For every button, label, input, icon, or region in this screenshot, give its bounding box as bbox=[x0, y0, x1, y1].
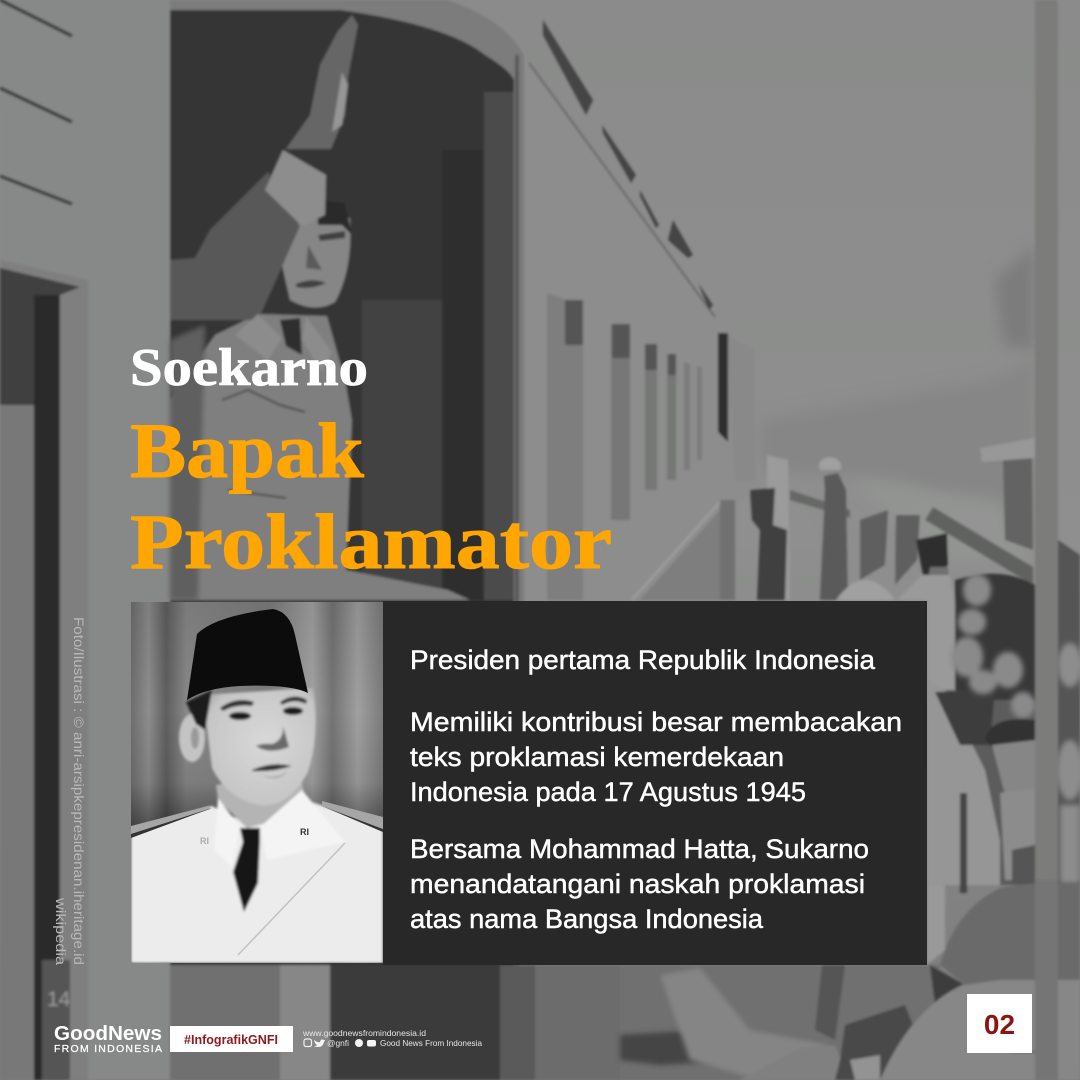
nose shadow bbox=[256, 726, 289, 751]
sleeve bbox=[170, 172, 300, 320]
photo credit bbox=[53, 617, 86, 966]
pocket flaps bbox=[222, 390, 305, 412]
uniform bbox=[131, 800, 383, 963]
man waving bbox=[170, 15, 470, 600]
distant haze and trees bbox=[760, 245, 1035, 600]
icon: facebook bbox=[355, 1039, 363, 1047]
train carriage side bbox=[524, 20, 760, 600]
neck bbox=[215, 782, 304, 830]
RI badges bbox=[200, 828, 308, 844]
footer logo: GoodNews From Indonesia bbox=[54, 1022, 162, 1055]
cuff bbox=[265, 150, 326, 226]
tie bbox=[233, 828, 260, 912]
title: Soekarno: Soekarno bbox=[130, 339, 368, 397]
text panel bbox=[383, 601, 927, 965]
photo credit: wikipedia bbox=[53, 897, 68, 966]
title: Bapak Proklamator bbox=[130, 407, 612, 585]
eyes bbox=[229, 712, 251, 720]
social links: Good News From Indonesia bbox=[380, 1038, 482, 1048]
fact 3: menandatangani naskah proklamasi bbox=[410, 869, 865, 899]
brows bbox=[220, 696, 307, 711]
fact 2: Indonesia pada 17 Agustus 1945 bbox=[410, 777, 806, 807]
social links: www.goodnewsfromindonesia.id bbox=[302, 1028, 426, 1038]
dark train door opening bbox=[170, 0, 524, 1080]
social links: @gnfi bbox=[327, 1038, 349, 1048]
fact 2 bbox=[410, 707, 902, 807]
hair bbox=[317, 200, 352, 235]
hashtag badge bbox=[170, 1026, 293, 1052]
fact 1: Presiden pertama Republik Indonesia bbox=[410, 645, 876, 675]
fez hat bbox=[187, 609, 308, 700]
page number bbox=[967, 994, 1032, 1053]
collar and tie bbox=[235, 314, 332, 372]
footer logo: GoodNews From Indonesia: GoodNews bbox=[54, 1022, 162, 1045]
icon: twitter bbox=[314, 1039, 325, 1047]
title: Bapak Proklamator: Proklamator bbox=[130, 498, 612, 585]
fact 2: teks proklamasi kemerdekaan bbox=[410, 742, 784, 772]
fact 2: Memiliki kontribusi besar membacakan bbox=[410, 707, 902, 737]
faint page number on the door: 14 bbox=[47, 988, 71, 1011]
footer logo: GoodNews From Indonesia: FROM INDONESIA bbox=[54, 1043, 162, 1055]
page number: 02 bbox=[984, 1009, 1015, 1040]
collar bbox=[216, 798, 232, 818]
mouth bbox=[252, 764, 292, 771]
icon: instagram bbox=[304, 1039, 312, 1046]
bottom foreground bbox=[170, 883, 1080, 1080]
epaulettes bbox=[131, 801, 383, 835]
crowd right of the pole bbox=[1057, 540, 1080, 885]
torso shadow on left bbox=[170, 325, 205, 600]
fact 3 bbox=[410, 834, 869, 934]
hashtag badge: #InfografikGNFI bbox=[184, 1033, 278, 1047]
fact 3: Bersama Mohammad Hatta, Sukarno bbox=[410, 834, 869, 864]
hair at the temple bbox=[186, 690, 212, 730]
social links bbox=[302, 1028, 482, 1048]
face bbox=[203, 688, 316, 806]
coat line bbox=[238, 843, 345, 955]
icon: youtube bbox=[367, 1040, 376, 1046]
face bbox=[282, 218, 350, 308]
RI badges: RI bbox=[200, 836, 209, 846]
title: Bapak Proklamator: Bapak bbox=[130, 407, 365, 494]
photo credit: Foto/Ilustrasi : © anri-arsipkepresidenan.iheritage.id bbox=[71, 617, 86, 965]
crowd beside the panel bbox=[927, 574, 1035, 893]
portrait of Soekarno bbox=[131, 602, 383, 963]
fact 3: atas nama Bangsa Indonesia bbox=[410, 904, 764, 934]
facial shadows bbox=[296, 231, 345, 288]
crowd on platform bbox=[750, 455, 1080, 893]
left wall bbox=[0, 0, 170, 1080]
torso bbox=[170, 314, 470, 600]
ear bbox=[179, 714, 205, 762]
hand bbox=[286, 15, 358, 149]
right pole, foreground overlap bbox=[1035, 880, 1058, 1080]
RI badges: RI bbox=[300, 827, 309, 837]
right pole bbox=[1035, 0, 1058, 1080]
